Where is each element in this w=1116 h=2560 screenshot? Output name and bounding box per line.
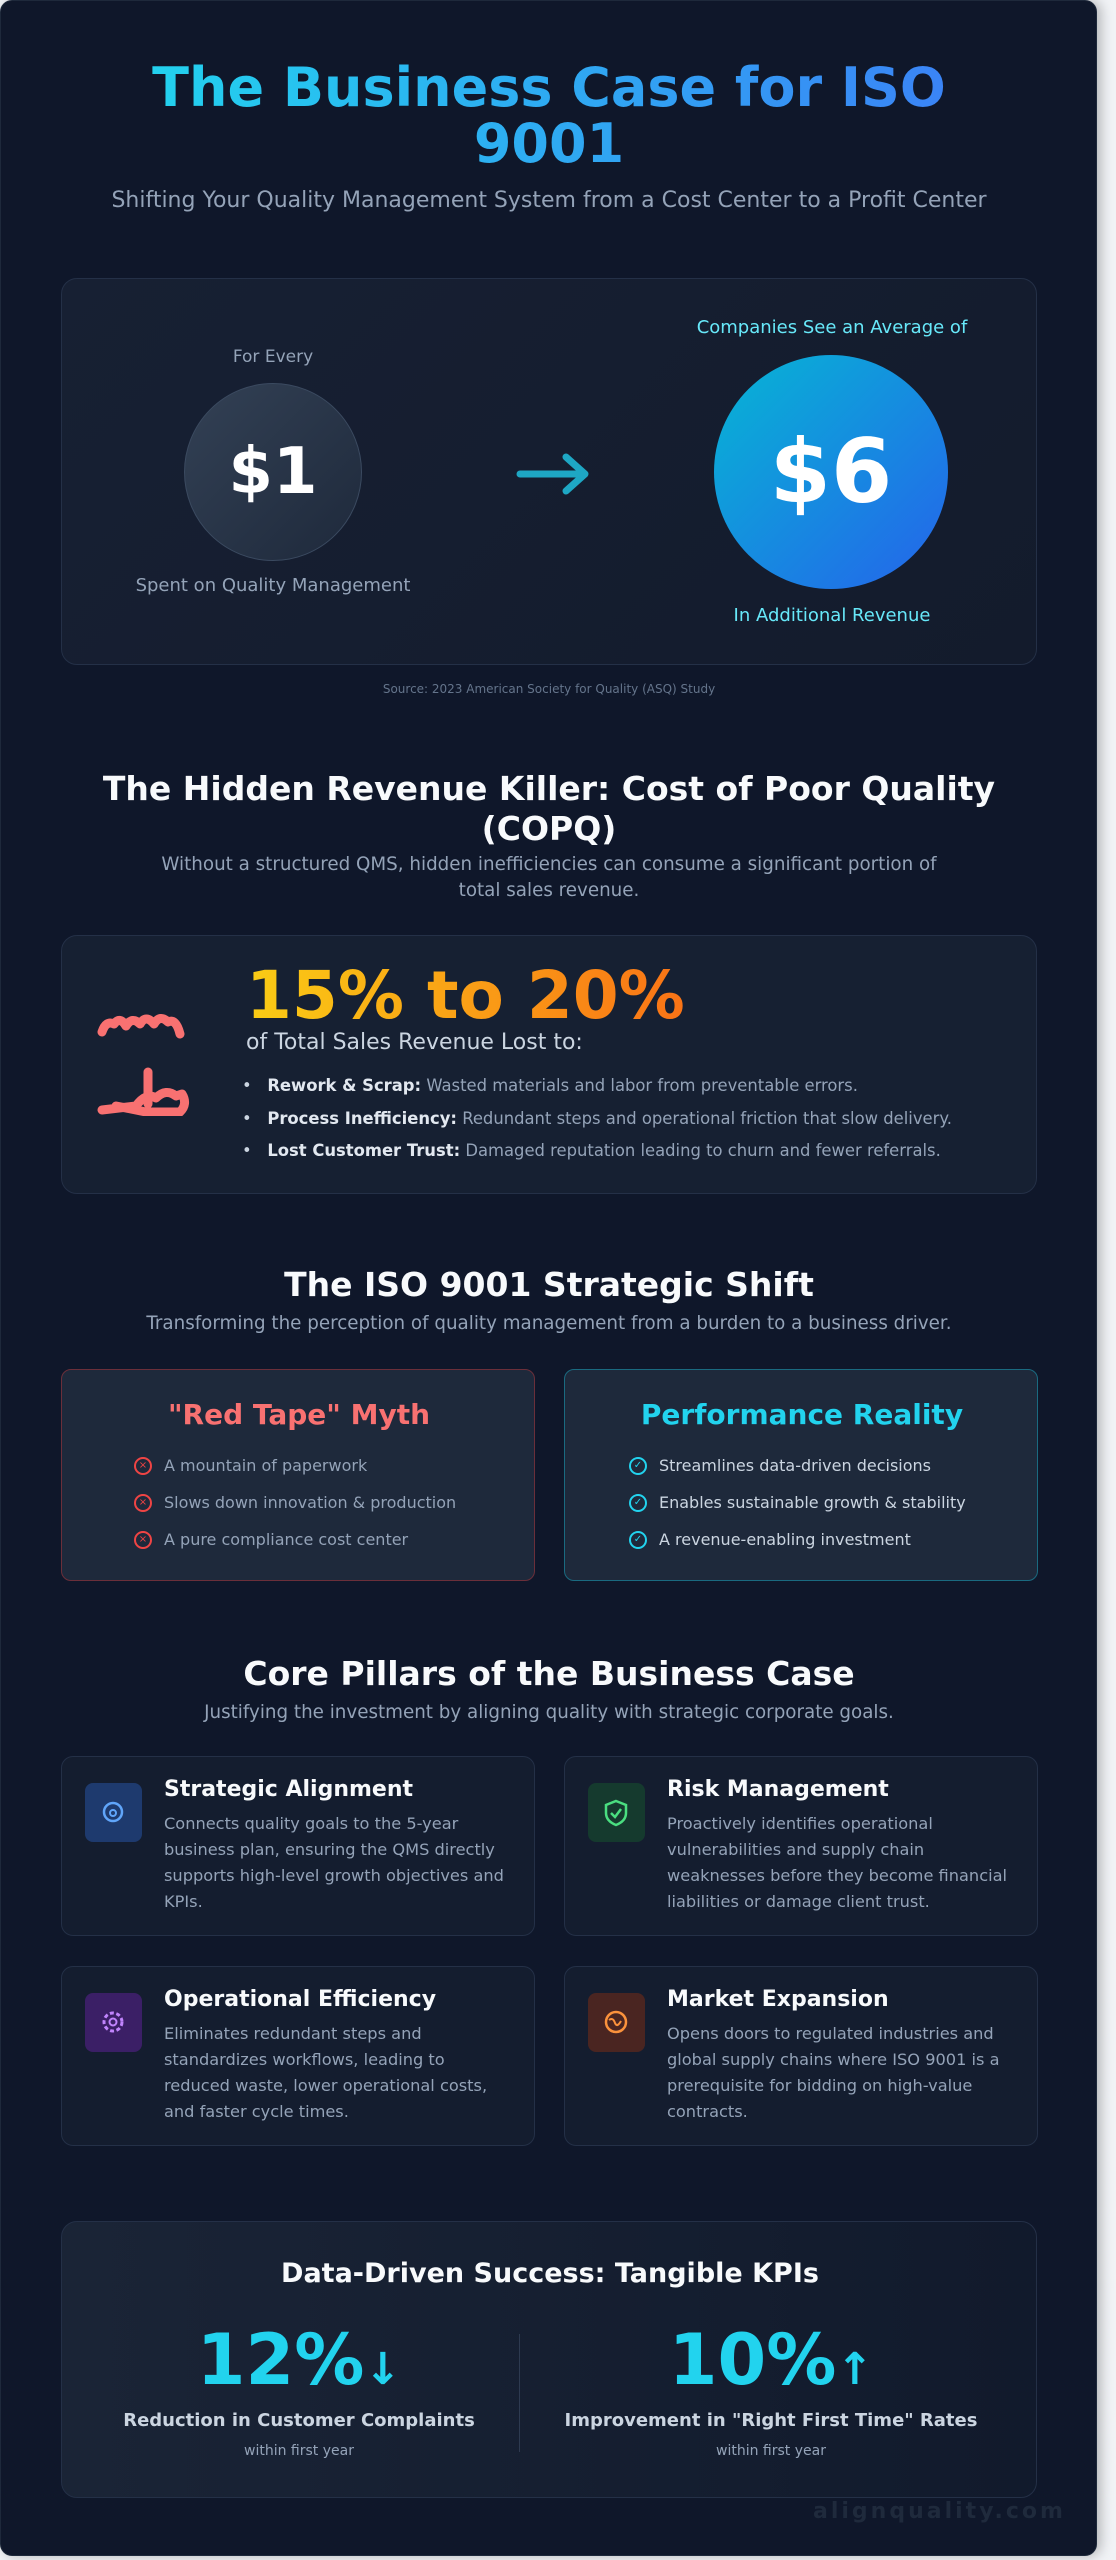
bullet list: • Lost Customer Trust: Damaged reputation leading to churn and fewer referrals.	[242, 1141, 941, 1160]
icon: target	[85, 1783, 142, 1842]
reality list: Enables sustainable growth & stability	[659, 1493, 966, 1512]
icon: money loss	[98, 1014, 190, 1116]
divider	[519, 2334, 520, 2452]
pillar: strategic alignment: Connects quality goals to the 5-year business plan, ensuring the QMS directly supports high-level growth objectives and KPIs.	[164, 1814, 504, 1911]
icon: $6 circle	[714, 355, 948, 589]
KPI: complaints	[123, 2319, 475, 2459]
icon: gear	[85, 1993, 142, 2052]
heading: COPQ: The Hidden Revenue Killer: Cost of Poor Quality (COPQ)	[103, 769, 995, 848]
text: shift intro: Transforming the perception of quality management from a burden to a business driver.	[146, 1313, 952, 1334]
icon: shield	[588, 1783, 645, 1842]
bullet list: • Process Inefficiency: Redundant steps and operational friction that slow delivery.	[242, 1109, 952, 1128]
pillar: market expansion: Opens doors to regulated industries and global supply chains where ISO 9001 is a prerequisite for bidding on high-value contracts.	[667, 2024, 1000, 2121]
reality list: ✓	[634, 1534, 642, 1544]
left caption: Spent on Quality Management	[136, 575, 410, 596]
reality list: A revenue-enabling investment	[659, 1530, 911, 1549]
icon: globe	[588, 1993, 645, 2052]
right caption: In Additional Revenue	[734, 605, 930, 626]
pillar: operational efficiency: Eliminates redundant steps and standardizes workflows, leading to reduced waste, lower operational costs, and faster cycle times.	[164, 2024, 487, 2121]
myth list: A pure compliance cost center	[164, 1530, 408, 1549]
reality list: ✓	[634, 1460, 642, 1470]
panel: reality	[564, 1369, 1038, 1581]
pillar: operational efficiency	[61, 1966, 535, 2146]
title: The Business Case for ISO 9001	[152, 56, 946, 175]
KPI: right first time: within first year	[716, 2443, 826, 2459]
KPI: right first time: 10%↑	[669, 2319, 873, 2401]
pillar: risk management	[564, 1756, 1038, 1936]
panel: COPQ	[61, 935, 1037, 1194]
KPI: complaints: 12%↓	[197, 2319, 401, 2401]
myth list: Slows down innovation & production	[164, 1493, 456, 1512]
myth list	[134, 1456, 456, 1549]
myth list: ×	[139, 1534, 147, 1544]
KPI: right first time: Improvement in "Right First Time" Rates	[565, 2410, 977, 2431]
myth list: A mountain of paperwork	[164, 1456, 367, 1475]
subtitle: Shifting Your Quality Management System from a Cost Center to a Profit Center	[111, 188, 987, 213]
icon: $1 circle	[184, 383, 362, 561]
stat: 15% to 20%: 15% to 20%	[246, 957, 685, 1034]
KPI: right first time	[565, 2319, 977, 2459]
text: pillars intro: Justifying the investment by aligning quality with strategic corporate goals.	[204, 1702, 894, 1723]
KPI heading: Data-Driven Success: Tangible KPIs	[281, 2258, 819, 2289]
myth list: ×	[139, 1460, 147, 1470]
pillar: risk management: Risk Management	[667, 1777, 889, 1802]
icon: $1 circle: $1	[228, 435, 318, 509]
icon: $6 circle: $6	[770, 420, 892, 523]
panel: ROI hero	[61, 278, 1037, 665]
KPI: complaints: within first year	[244, 2443, 354, 2459]
pillar: operational efficiency: Operational Efficiency	[164, 1987, 436, 2012]
pillar: risk management: Proactively identifies operational vulnerabilities and supply chain weaknesses before they become financial liabilities or damage client trust.	[667, 1814, 1007, 1911]
watermark: alignquality.com	[813, 2499, 1066, 2524]
left label: For Every	[233, 347, 313, 367]
reality list	[629, 1456, 966, 1549]
panel: myth	[61, 1369, 535, 1581]
heading: strategic shift: The ISO 9001 Strategic Shift	[284, 1265, 814, 1304]
reality list: Streamlines data-driven decisions	[659, 1456, 931, 1475]
right label: Companies See an Average of	[697, 317, 967, 338]
text: COPQ intro: Without a structured QMS, hidden inefficiencies can consume a significant portion of total sales revenue.	[161, 854, 937, 901]
reality heading: Performance Reality	[641, 1398, 963, 1431]
stat caption: of Total Sales Revenue Lost to:	[246, 1030, 583, 1055]
arrow	[516, 454, 588, 494]
reality list: ✓	[634, 1496, 642, 1508]
heading: core pillars: Core Pillars of the Business Case	[243, 1654, 855, 1693]
pillar: strategic alignment	[61, 1756, 535, 1936]
myth list: ×	[139, 1496, 147, 1508]
pillar: market expansion	[564, 1966, 1038, 2146]
myth heading: "Red Tape" Myth	[168, 1398, 430, 1431]
panel: KPIs	[61, 2221, 1037, 2498]
pillar: market expansion: Market Expansion	[667, 1987, 889, 2012]
KPI: complaints: Reduction in Customer Complaints	[123, 2410, 475, 2431]
source note: Source: 2023 American Society for Quality (ASQ) Study	[383, 682, 715, 696]
bullet list: • Rework & Scrap: Wasted materials and labor from preventable errors.	[242, 1076, 858, 1095]
pillar: strategic alignment: Strategic Alignment	[164, 1777, 413, 1802]
bullet list	[242, 1076, 952, 1160]
